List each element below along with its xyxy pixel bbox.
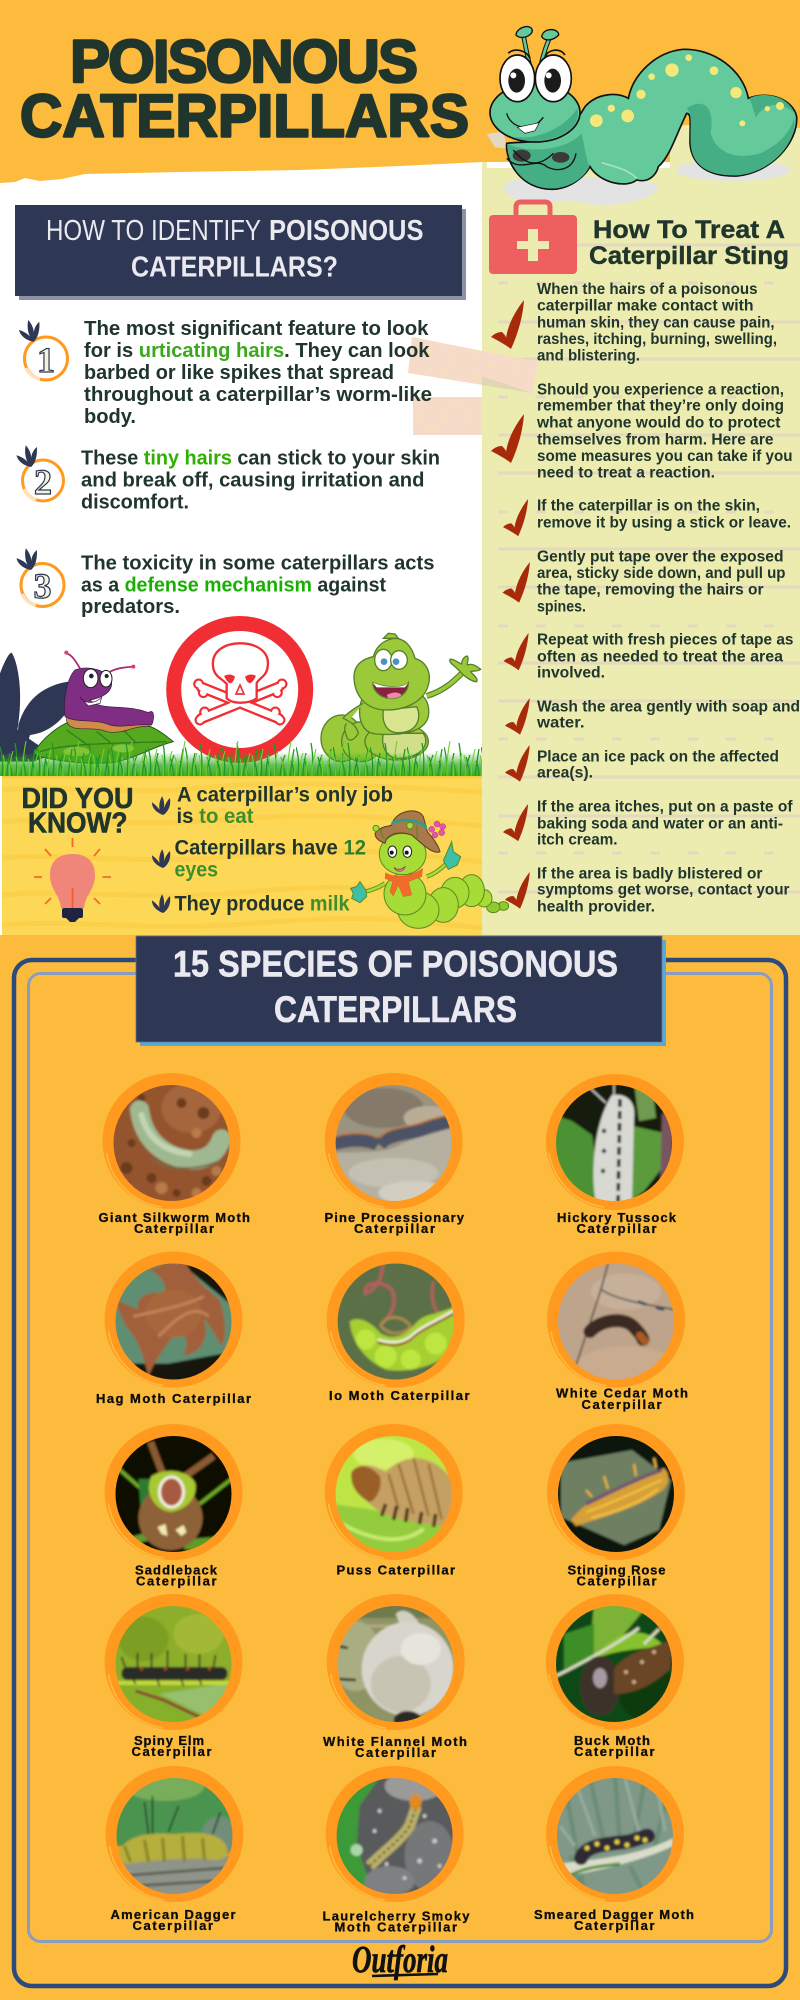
text: should you: what anyone would do to protect	[536, 415, 780, 432]
text: tape	[537, 549, 786, 616]
text: repeat: involved.	[537, 665, 605, 682]
banner: 15 species	[136, 936, 666, 1046]
text: wash: Wash the area gently with soap and	[537, 699, 800, 716]
species: saddleback	[104, 1424, 242, 1589]
heading: did you know: KNOW?	[28, 807, 128, 839]
label: Pine Processionary	[324, 1210, 465, 1225]
header: torn orange banner	[0, 0, 800, 183]
label: Spiny Elm	[134, 1733, 204, 1748]
text: treatment steps	[536, 281, 800, 915]
photo	[325, 1424, 463, 1560]
fact: twelve eyes: eyes	[174, 859, 218, 882]
label	[98, 1210, 250, 1236]
species: smeared dagger moth	[534, 1766, 694, 1933]
text: hairs contact: human skin, they can cause pain,	[537, 315, 774, 332]
label	[568, 1563, 666, 1589]
label	[557, 1210, 677, 1236]
text: repeat: Repeat with fresh pieces of tape as	[537, 632, 794, 649]
text: wash	[536, 699, 800, 732]
text: repeat: often as needed to treat the area	[537, 649, 783, 666]
label: Caterpillar	[576, 1221, 656, 1236]
photo	[547, 1252, 685, 1388]
icon: check 4	[502, 562, 530, 603]
panel: species section background	[0, 935, 800, 2000]
heading: how to treat	[589, 216, 789, 270]
banner: how to identify: POISONOUS	[269, 215, 424, 247]
label: Hickory Tussock	[557, 1210, 677, 1225]
photo	[102, 1073, 240, 1209]
photo	[106, 1766, 244, 1902]
text: paste	[537, 799, 793, 849]
text: health provider: symptoms get worse, contact your	[537, 882, 790, 899]
banner: 15 species: CATERPILLARS	[274, 989, 517, 1030]
label: Caterpillar	[132, 1918, 213, 1933]
text: hairs contact: and blistering.	[537, 348, 640, 365]
icon: number 1	[19, 320, 68, 380]
text: tape: spines.	[537, 599, 586, 616]
step 3	[16, 548, 434, 618]
label: White Cedar Moth	[556, 1386, 688, 1401]
text: step 1: barbed or like spikes that spread	[84, 362, 394, 384]
label: Hag Moth Caterpillar	[96, 1391, 251, 1406]
text: step 1	[84, 318, 432, 428]
illustration: bandages	[408, 337, 538, 435]
fact: produce milk: They produce milk	[174, 893, 350, 916]
title	[20, 28, 469, 150]
text: tape: the tape, removing the hairs or	[537, 582, 764, 599]
label: Caterpillar	[355, 1745, 436, 1760]
text: step 1: for is urticating hairs. They can look	[84, 340, 430, 362]
label	[323, 1734, 467, 1760]
banner: how to identify: CATERPILLARS?	[131, 252, 338, 284]
text: tape: area, sticky side down, and pull up	[537, 565, 786, 582]
species: pine processionary	[324, 1073, 465, 1236]
banner: how to identify	[15, 205, 466, 300]
text: should you: some measures you can take if you	[537, 448, 792, 465]
species: laurelcherry smoky moth	[322, 1766, 470, 1935]
icon: number 3	[16, 548, 64, 606]
text: step 3	[81, 552, 434, 618]
photo	[327, 1252, 465, 1388]
label: Caterpillar	[136, 1574, 216, 1589]
species: giant silkworm moth	[98, 1073, 250, 1236]
illustration: green caterpillar mascot	[487, 27, 797, 205]
icon: poison warning sign	[174, 624, 306, 756]
illustration: purple caterpillar on leaf	[33, 651, 173, 763]
species: white flannel moth	[323, 1594, 467, 1760]
label: Caterpillar	[354, 1221, 435, 1236]
text: step 1: The most significant feature to look	[84, 318, 429, 340]
icon: number 3: 3	[34, 566, 52, 606]
label	[110, 1907, 236, 1933]
icon: check 3	[503, 499, 528, 536]
banner: 15 species: 15 SPECIES OF POISONOUS	[173, 944, 618, 984]
text: remove: remove it by using a stick or leave.	[537, 514, 791, 531]
step 1	[19, 318, 432, 428]
text: ice pack: area(s).	[537, 765, 593, 782]
fact: twelve eyes: Caterpillars have 12	[174, 837, 366, 860]
text: step 3: predators.	[81, 596, 180, 618]
text: tape: Gently put tape over the exposed	[537, 549, 784, 566]
species: spiny elm	[104, 1594, 242, 1759]
icon: check 8	[503, 804, 528, 841]
title: CATERPILLARS	[20, 82, 469, 150]
label: Moth Caterpillar	[334, 1920, 457, 1935]
text: should you: remember that they’re only doing	[537, 398, 784, 415]
text: hairs contact: When the hairs of a poisonous	[537, 281, 758, 298]
text: step 1: throughout a caterpillar’s worm-like	[84, 384, 432, 406]
photo	[327, 1594, 465, 1730]
text: remove	[537, 498, 791, 531]
text: repeat	[537, 632, 794, 682]
text: step 2: discomfort.	[81, 491, 189, 513]
illustration: navy plant	[0, 653, 68, 762]
text: health provider: health provider.	[537, 898, 655, 915]
frame: outer border	[14, 960, 786, 1986]
label: Puss Caterpillar	[336, 1563, 455, 1578]
photo	[546, 1074, 684, 1210]
title: POISONOUS	[70, 28, 418, 95]
icon: check 2	[491, 414, 524, 463]
step 2	[16, 445, 440, 513]
heading: did you know: DID YOU	[22, 783, 134, 815]
species: american dagger	[106, 1766, 244, 1933]
label	[322, 1909, 470, 1935]
label: Caterpillar	[134, 1221, 214, 1236]
label: Caterpillar	[574, 1918, 654, 1933]
photo	[546, 1766, 684, 1902]
icon: number 1: 1	[37, 340, 55, 380]
logo: Outforia: Outforia	[352, 1939, 448, 1981]
label: Smeared Dagger Moth	[534, 1907, 694, 1922]
text: should you: Should you experience a reaction,	[537, 381, 784, 398]
icon: check 6	[505, 698, 530, 735]
species: puss	[325, 1424, 463, 1578]
photo	[326, 1766, 464, 1902]
illustration: grass	[0, 735, 482, 776]
species: white cedar moth	[547, 1252, 688, 1412]
label: Buck Moth	[574, 1733, 650, 1748]
text: should you: themselves from harm. Here are	[537, 432, 774, 449]
photo	[325, 1073, 463, 1209]
label: Giant Silkworm Moth	[98, 1210, 250, 1225]
label: Caterpillar	[582, 1397, 662, 1412]
text: step 2: and break off, causing irritation and	[81, 470, 424, 492]
banner: how to identify: HOW TO IDENTIFY	[46, 215, 261, 247]
illustration: waving green caterpillar	[321, 633, 481, 762]
fact: twelve eyes	[152, 837, 366, 882]
illustration: cowboy caterpillar	[351, 811, 509, 928]
label	[556, 1386, 688, 1412]
label	[132, 1733, 212, 1759]
decorative rules on treatment panel	[498, 245, 800, 892]
label: Stinging Rose	[568, 1563, 666, 1578]
label: American Dagger	[110, 1907, 236, 1922]
text: hairs contact: rashes, itching, burning, swelling,	[537, 331, 777, 348]
text: step 3: as a defense mechanism against	[81, 575, 386, 597]
text: step 2	[81, 447, 440, 513]
label: Saddleback	[135, 1563, 218, 1578]
heading: how to treat: Caterpillar Sting	[589, 242, 789, 270]
label: Io Moth Caterpillar	[329, 1388, 470, 1403]
photo	[104, 1424, 242, 1560]
species: hag moth	[96, 1252, 251, 1406]
species: io moth	[327, 1252, 470, 1403]
label: Caterpillar	[574, 1744, 654, 1759]
heading: did you know	[22, 783, 134, 839]
icon: check 1	[491, 300, 524, 349]
text: paste: If the area itches, put on a paste of	[537, 799, 793, 816]
text: step 3: The toxicity in some caterpillars acts	[81, 552, 434, 574]
checkmarks	[491, 300, 530, 909]
icon: light bulb	[34, 838, 111, 922]
frame: inner border	[28, 974, 772, 1942]
text: step 1: body.	[84, 406, 136, 428]
label	[574, 1733, 654, 1759]
species: stinging rose	[547, 1424, 685, 1589]
text: should you: need to treat a reaction.	[537, 465, 715, 482]
icon: number 2	[16, 445, 64, 502]
icon: number 2: 2	[34, 462, 52, 502]
fact: only job	[152, 784, 393, 828]
photo	[546, 1594, 684, 1730]
icon: first aid kit	[489, 202, 577, 274]
text: should you	[536, 381, 792, 482]
text: health provider	[537, 865, 790, 915]
heading: how to treat: How To Treat A	[593, 216, 785, 244]
text: wash: water.	[536, 715, 584, 732]
text: hairs contact	[537, 281, 777, 365]
fact: only job: A caterpillar’s only job	[177, 784, 393, 807]
text: step 2: These tiny hairs can stick to your skin	[81, 447, 440, 469]
label: Laurelcherry Smoky	[322, 1909, 470, 1924]
species: buck moth	[546, 1594, 684, 1759]
panel: treatment panel background	[482, 125, 800, 935]
text: paste: itch cream.	[537, 832, 618, 849]
icon: check 7	[505, 745, 530, 782]
label: Caterpillar	[132, 1744, 212, 1759]
icon: check 9	[505, 872, 530, 909]
text: remove: If the caterpillar is on the skin,	[537, 498, 760, 515]
photo	[104, 1594, 242, 1730]
panel: did you know	[2, 776, 482, 935]
photo	[104, 1252, 242, 1388]
icon: check 5	[504, 633, 529, 670]
label	[534, 1907, 694, 1933]
label: White Flannel Moth	[323, 1734, 467, 1749]
text: hairs contact: caterpillar make contact with	[537, 298, 754, 315]
text: paste: baking soda and water or an anti-	[537, 815, 783, 832]
species: hickory tussock	[546, 1074, 684, 1236]
photo	[547, 1424, 685, 1560]
fact: only job: is to eat	[176, 805, 254, 828]
text: ice pack	[537, 749, 779, 782]
label	[135, 1563, 218, 1589]
label	[324, 1210, 465, 1236]
text: health provider: If the area is badly blistered or	[537, 865, 762, 882]
label: Caterpillar	[576, 1574, 656, 1589]
text: ice pack: Place an ice pack on the affected	[537, 749, 779, 766]
